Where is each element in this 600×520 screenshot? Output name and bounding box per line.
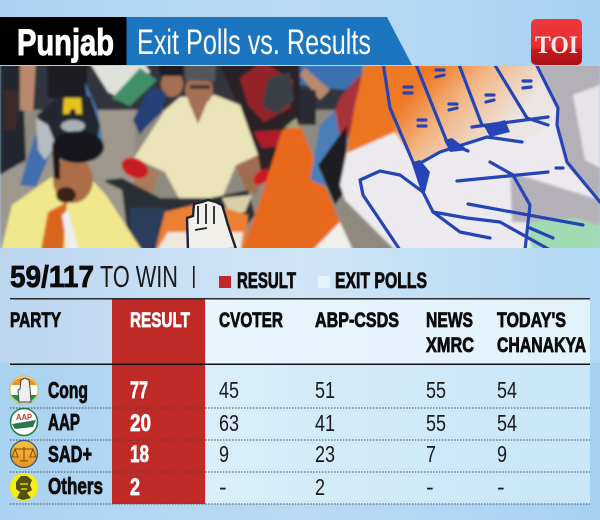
legend item: exit polls: EXIT POLLS xyxy=(335,268,427,293)
title box: Punjab xyxy=(0,17,126,65)
right bike xyxy=(220,66,302,172)
row: AAP xyxy=(10,408,517,437)
hand symbol outline xyxy=(360,62,600,250)
row: SAD+: 9 xyxy=(497,441,507,467)
icon: Congress hand xyxy=(10,376,38,404)
subtitle ribbon: Exit Polls vs. Results: Exit Polls vs. Results xyxy=(137,23,371,62)
row: SAD+: SAD+ xyxy=(48,441,92,467)
table header row xyxy=(10,309,586,357)
legend xyxy=(219,268,427,293)
row: AAP: 41 xyxy=(315,410,335,436)
icon: SAD scales xyxy=(10,440,38,468)
row: Others: Others xyxy=(48,473,103,499)
large Congress flag xyxy=(539,66,600,199)
icon: hand on bike flag xyxy=(187,200,236,250)
photo: rally with Congress flags xyxy=(0,60,600,255)
row: Cong: Cong xyxy=(48,377,88,403)
heading: seats to win: TO WIN xyxy=(100,259,178,294)
row: Cong xyxy=(10,376,517,404)
row: AAP: 55 xyxy=(426,410,446,436)
row: AAP: 63 xyxy=(219,410,239,436)
table header row: RESULT xyxy=(130,309,190,332)
icon: AAP broom: AAP xyxy=(16,413,33,422)
icon: AAP broom xyxy=(10,408,38,436)
background crowd right xyxy=(300,60,362,90)
results table xyxy=(10,298,590,504)
man: cream shirt xyxy=(134,95,258,200)
row: Others: - xyxy=(497,474,505,500)
row: Others: - xyxy=(219,474,227,500)
row: Cong: 55 xyxy=(426,377,446,403)
row: AAP: AAP xyxy=(48,409,80,435)
middle bg man xyxy=(161,71,183,97)
heading: seats to win xyxy=(10,259,195,294)
row: Cong: 54 xyxy=(497,377,517,403)
row: SAD+: 7 xyxy=(426,441,436,467)
subtitle ribbon: Exit Polls vs. Results xyxy=(126,17,412,65)
row: Others: 2 xyxy=(130,474,140,501)
row: Cong: 51 xyxy=(315,377,335,403)
icon: TOI logo: TOI xyxy=(535,32,578,59)
row: AAP: 20 xyxy=(130,410,151,437)
icon: red mirror xyxy=(120,156,150,180)
row: Others: - xyxy=(426,474,434,500)
table header row: ABP-CSDS xyxy=(315,309,399,332)
row: Others xyxy=(10,473,505,501)
icon: Others portrait xyxy=(10,473,38,501)
row: SAD+: 23 xyxy=(315,441,335,467)
left biker behind xyxy=(47,66,88,98)
heading: seats to win: 59/117 xyxy=(10,259,94,294)
row: AAP: 54 xyxy=(497,410,517,436)
row: SAD+: 9 xyxy=(219,441,229,467)
icon: TOI logo xyxy=(531,19,582,65)
table header row: TODAY'S xyxy=(497,309,566,332)
row: SAD+: 18 xyxy=(130,441,149,468)
row: SAD+ xyxy=(10,440,507,468)
row: Cong: 77 xyxy=(130,377,148,404)
row: Cong: 45 xyxy=(219,377,239,403)
legend item: exit polls xyxy=(318,268,427,293)
orange flag xyxy=(241,125,340,255)
legend item: result xyxy=(219,268,296,293)
table header row: XMRC xyxy=(426,334,474,357)
legend item: result: RESULT xyxy=(237,268,296,293)
title box: Punjab: Punjab xyxy=(17,22,114,63)
table header row: PARTY xyxy=(10,309,61,332)
table header row: NEWS xyxy=(426,309,473,332)
exit polls column background xyxy=(206,299,590,504)
bike flag with hand xyxy=(154,202,248,255)
green flag xyxy=(89,66,152,97)
man: yellow shirt, front xyxy=(0,176,145,255)
table header row: CVOTER xyxy=(219,309,283,332)
row: Others: 2 xyxy=(315,474,325,500)
result column background xyxy=(112,299,205,504)
road patch xyxy=(105,181,128,226)
header banner xyxy=(0,17,412,65)
